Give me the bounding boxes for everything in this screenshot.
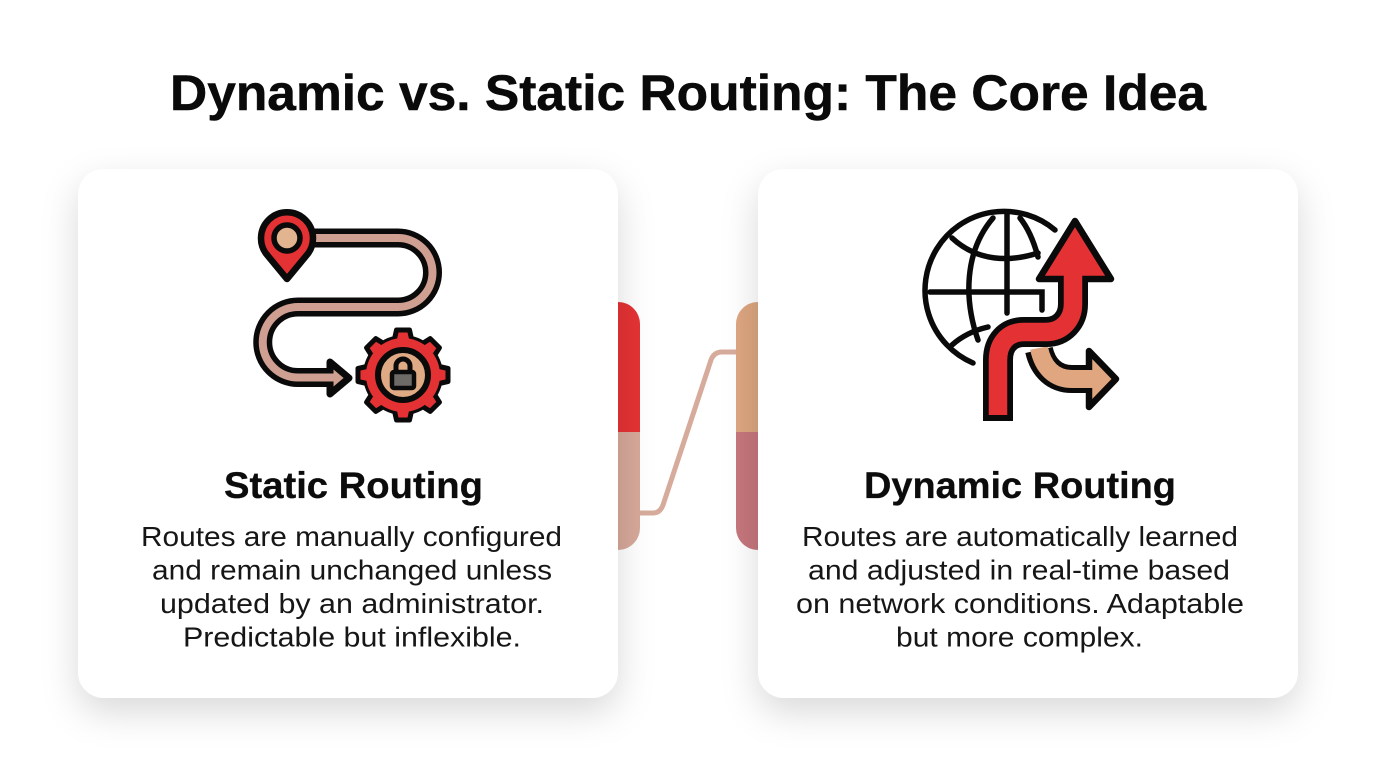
right connector tab [736,302,776,550]
red main arrow [998,221,1111,421]
panel: static routing [78,169,618,698]
route path outline [263,238,432,378]
globe [925,211,1055,363]
body text: on network conditions. Adaptable [796,588,1244,619]
card background [758,169,1298,698]
body text [796,521,1244,652]
location pin [261,212,313,279]
body text: and adjusted in real-time based [808,554,1230,586]
body text [141,521,562,652]
heading: Static Routing [224,465,483,506]
title: Dynamic vs. Static Routing: The Core Idea [170,65,1207,121]
icon: globe with adaptive arrows [925,211,1116,421]
body text: Predictable but inflexible. [183,622,521,652]
route arrow head [330,362,349,394]
body text: Routes are automatically learned [802,521,1238,552]
body text: Routes are manually configured [141,521,562,552]
card background [78,169,618,698]
icon: route from pin to locked gear [261,212,448,420]
orange branch arrow [1039,348,1116,407]
left connector tab [600,302,640,550]
connector line [640,352,736,513]
heading: Dynamic Routing [864,465,1176,506]
body text: and remain unchanged unless [152,554,552,586]
body text: but more complex. [896,622,1143,652]
connector between panels [600,302,776,550]
body text: updated by an administrator. [160,588,544,619]
panel: dynamic routing [758,169,1298,698]
route path fill [263,238,432,378]
gear with padlock [358,330,448,420]
